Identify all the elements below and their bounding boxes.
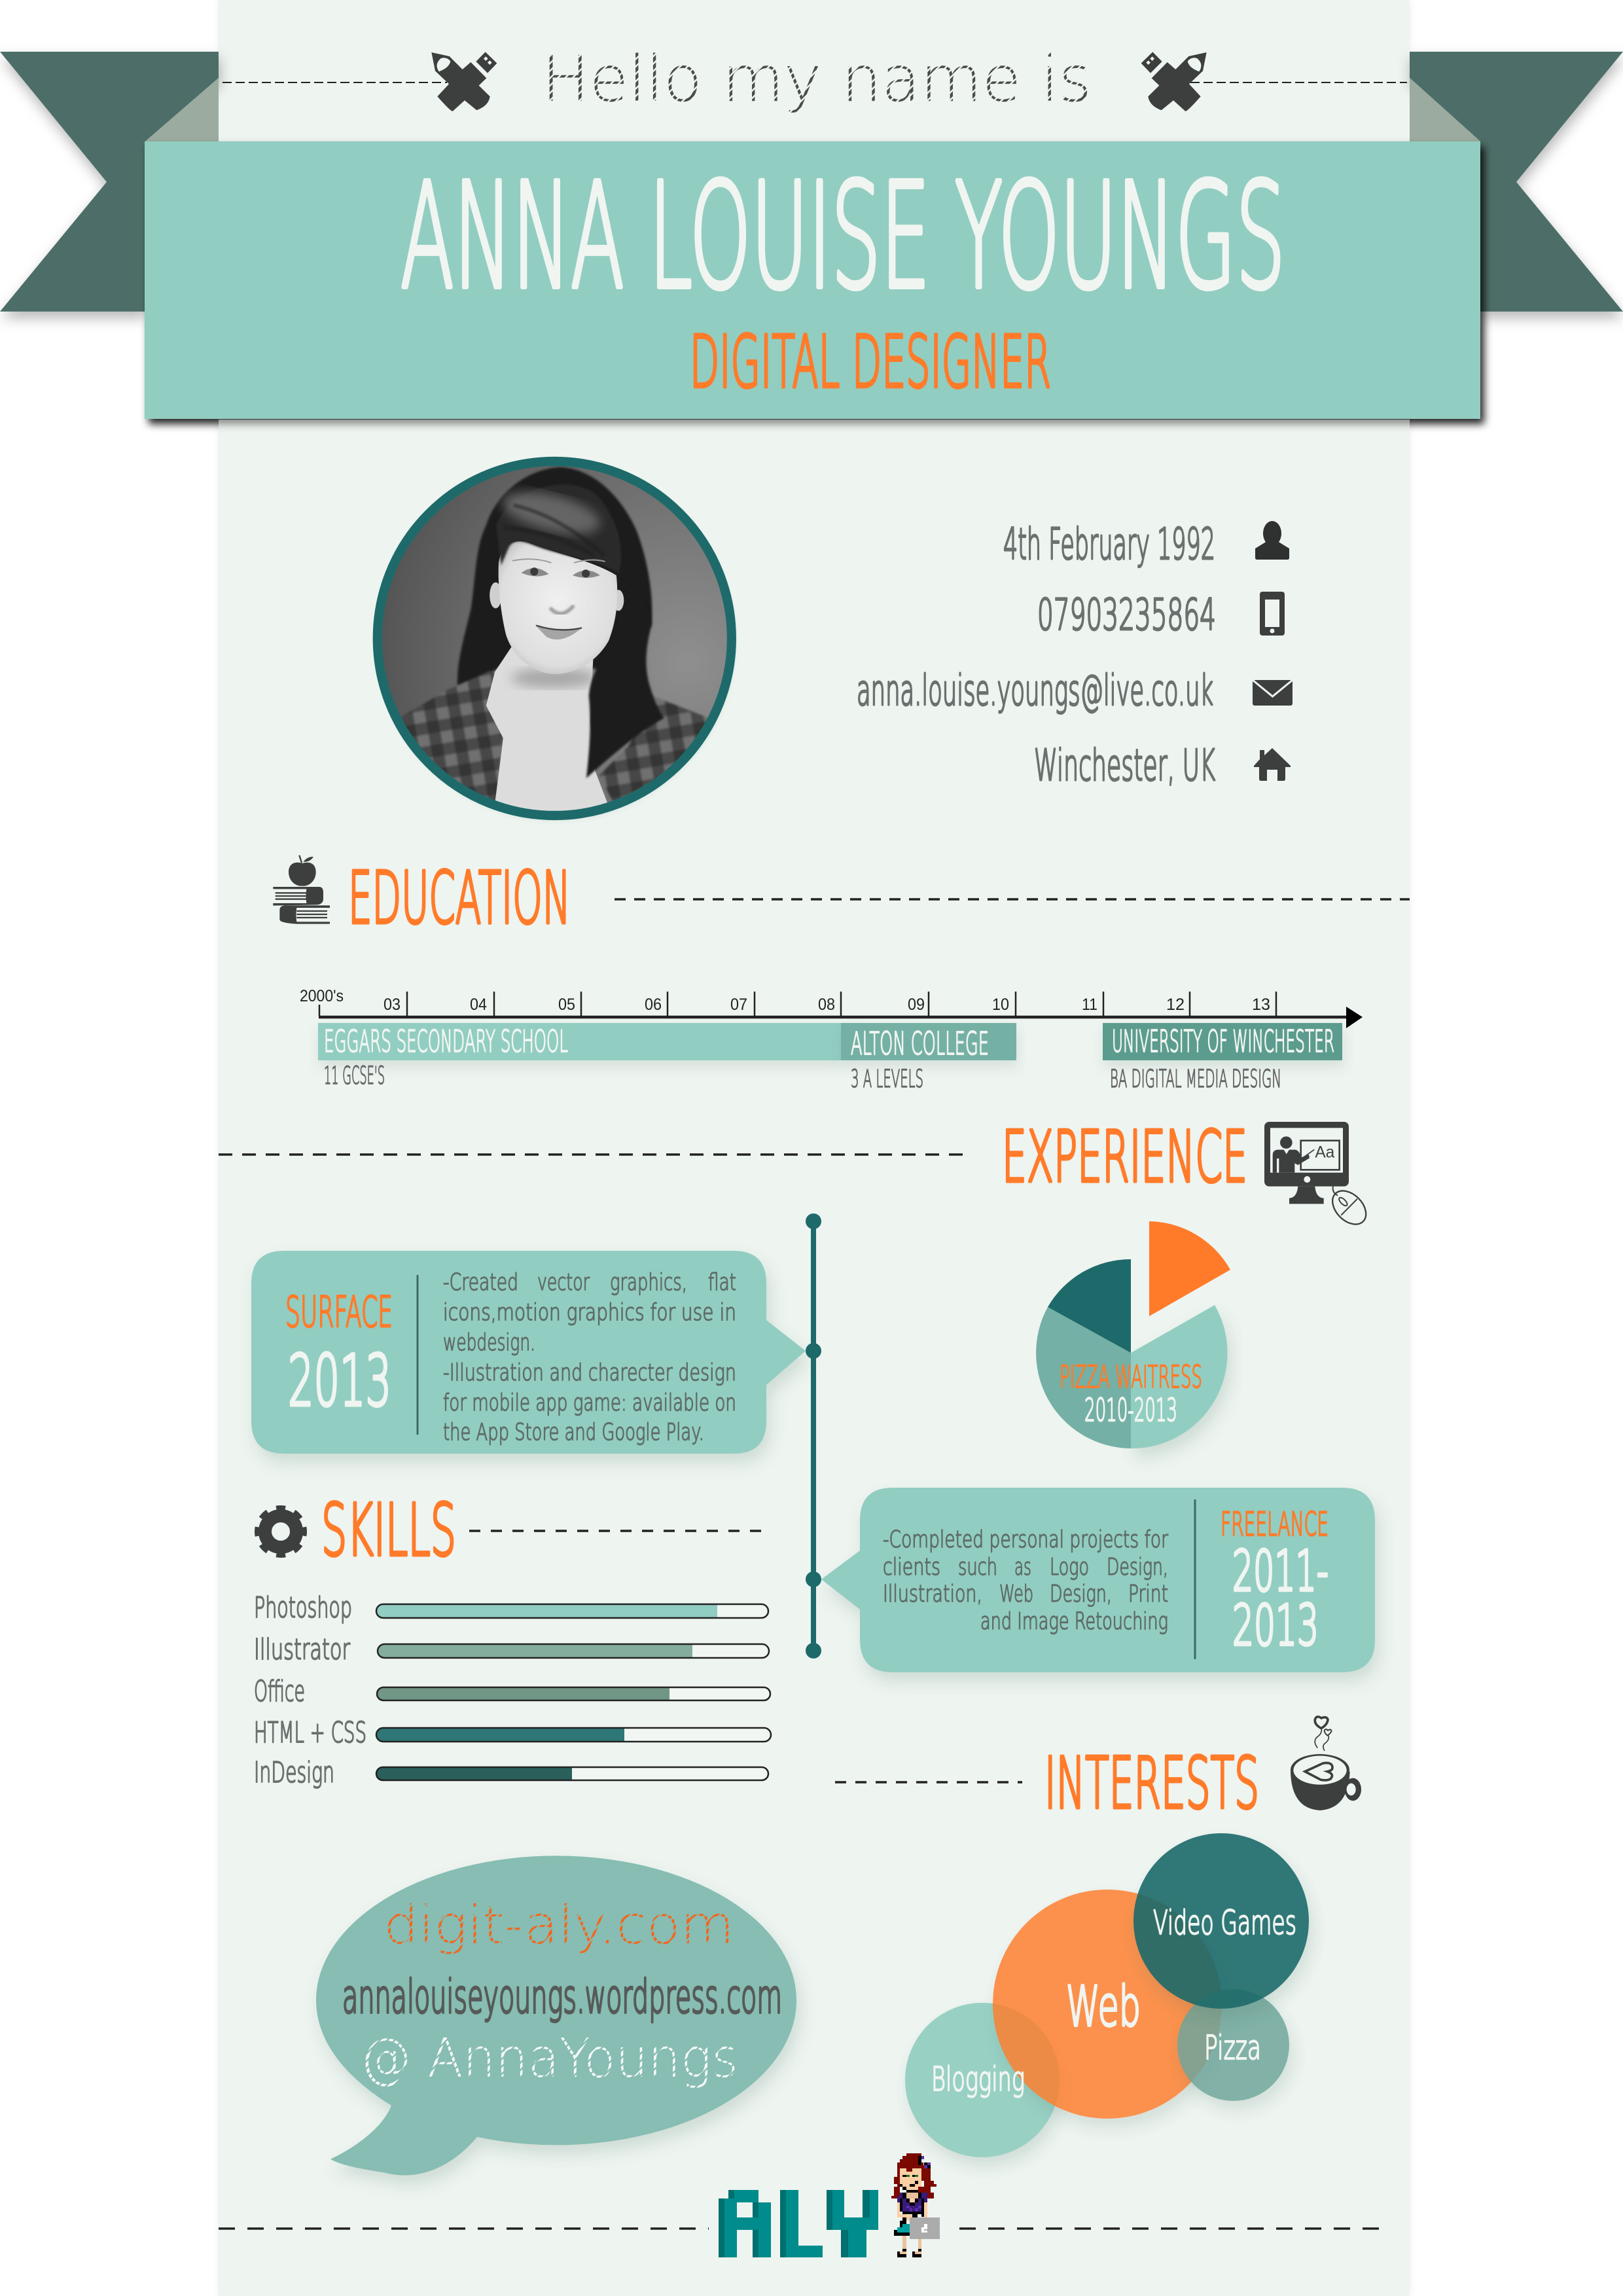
timeline year labels: 2000's — [300, 987, 344, 1005]
skill: photoshop — [254, 1591, 768, 1624]
timeline year labels: 03 — [383, 996, 401, 1014]
labels — [931, 1904, 1296, 2099]
label: pizza waitress: PIZZA WAITRESS — [1060, 1359, 1202, 1395]
hello line with icons — [223, 43, 1407, 116]
skill: office: Office — [254, 1675, 305, 1708]
job description: for mobile app game: available on — [443, 1390, 736, 1416]
icon: pencil and usb right — [1141, 52, 1207, 111]
card shape with pointer — [251, 1251, 806, 1454]
speech bubble shape — [316, 1856, 796, 2176]
text: location: Winchester, UK — [1034, 740, 1215, 791]
icon: coffee cup — [1291, 1717, 1361, 1810]
qualification labels: BA DIGITAL MEDIA DESIGN — [1110, 1065, 1281, 1093]
labels: Web — [1066, 1975, 1141, 2039]
heading: experience: EXPERIENCE — [1002, 1117, 1247, 1198]
skills bars — [254, 1591, 771, 1789]
timeline bar: university — [1103, 1023, 1342, 1060]
icon: person — [1255, 521, 1289, 560]
job description: such — [958, 1554, 997, 1581]
timeline year labels: 08 — [818, 996, 835, 1014]
label: freelance years — [1232, 1539, 1329, 1659]
pixel character — [891, 2153, 940, 2257]
icon: phone — [1260, 592, 1285, 636]
job description: clients — [883, 1554, 940, 1581]
school labels: UNIVERSITY OF WINCHESTER — [1112, 1024, 1334, 1059]
heading: education: EDUCATION — [348, 856, 571, 940]
bubble: video games — [1133, 1833, 1309, 2009]
timeline year labels: 07 — [730, 996, 747, 1014]
icon: pencil and usb left — [431, 52, 497, 111]
bubble: blogging — [905, 2003, 1060, 2157]
pixel letters — [719, 2190, 878, 2257]
pie: orange slice — [1149, 1221, 1230, 1316]
ribbon: main band — [145, 141, 1480, 419]
link: digit-aly.com: digit-aly.com — [383, 1895, 734, 1956]
timeline year labels — [300, 987, 1270, 1014]
page background panel — [219, 0, 1410, 2296]
heading: hello my name is: Hello my name is — [542, 43, 1092, 116]
interest bubbles — [905, 1833, 1309, 2157]
ribbon: left fold — [145, 78, 219, 141]
labels: Pizza — [1204, 2029, 1261, 2068]
timeline year labels: 04 — [470, 996, 487, 1014]
timeline year labels: 05 — [558, 996, 575, 1014]
skill: html and css — [254, 1716, 771, 1749]
timeline year labels: 11 — [1082, 996, 1097, 1014]
job description: -Illustration and charecter design — [443, 1359, 736, 1386]
icon: house — [1254, 748, 1291, 781]
heading: skills: SKILLS — [321, 1488, 456, 1572]
card shape with pointer — [821, 1488, 1375, 1672]
job description: Illustration, — [883, 1581, 982, 1607]
link: wordpress blog: annalouiseyoungs.wordpress.com — [342, 1970, 782, 2024]
ribbon: right tail — [1410, 52, 1623, 312]
labels: Blogging — [931, 2060, 1025, 2099]
timeline year labels: 13 — [1252, 996, 1270, 1014]
text: birth date: 4th February 1992 — [1003, 519, 1215, 569]
portrait photo illustration — [368, 455, 744, 831]
text: phone: 07903235864 — [1037, 590, 1216, 640]
bubble: web — [993, 1890, 1222, 2119]
pie: mid slice — [1036, 1307, 1131, 1448]
skill: photoshop: Photoshop — [254, 1591, 352, 1624]
icon: envelope — [1253, 680, 1293, 706]
job description: graphics, — [610, 1269, 687, 1296]
skill: html and css: HTML + CSS — [254, 1716, 366, 1749]
job description: as — [1014, 1554, 1031, 1581]
job description: flat — [708, 1269, 736, 1296]
icon: monitor and mouse — [1264, 1122, 1372, 1230]
label: year: 2013 — [288, 1340, 391, 1422]
label: pizza years: 2010-2013 — [1084, 1392, 1177, 1429]
job description: Print — [1128, 1581, 1168, 1607]
qualification labels: 11 GCSE'S — [324, 1062, 385, 1090]
panel: freelance job card — [821, 1488, 1375, 1672]
section: experience heading — [219, 1117, 1372, 1230]
ribbon: right fold — [1410, 78, 1480, 141]
label: freelance years: 2013 — [1232, 1593, 1319, 1659]
job description: Design, — [1050, 1581, 1112, 1607]
timeline arrow — [1346, 1007, 1363, 1028]
icon: monitor and mouse: Aa — [1315, 1143, 1335, 1161]
timeline axis — [319, 992, 1349, 1017]
job description — [443, 1269, 736, 1446]
skill: illustrator — [254, 1633, 769, 1666]
panel: speech bubble with links — [316, 1856, 796, 2176]
job description: webdesign. — [443, 1329, 535, 1356]
job description — [883, 1526, 1168, 1635]
timeline year labels: 06 — [645, 996, 662, 1014]
icon: gear — [258, 1509, 304, 1554]
job description: -Created — [443, 1269, 518, 1296]
job description: -Completed personal projects for — [883, 1526, 1168, 1553]
timeline bar: eggars — [318, 1023, 841, 1060]
icon: apple and books — [273, 855, 330, 924]
section: skills heading — [258, 1488, 764, 1572]
link: twitter handle: @ AnnaYoungs — [360, 2028, 738, 2090]
qualification labels: 3 A LEVELS — [851, 1065, 923, 1093]
job description: vector — [537, 1269, 590, 1296]
subtitle: digital designer: DIGITAL DESIGNER — [690, 320, 1051, 404]
education timeline — [300, 987, 1363, 1093]
school labels: ALTON COLLEGE — [851, 1026, 989, 1062]
text: email: anna.louise.youngs@live.co.uk — [857, 667, 1213, 715]
school labels — [324, 1024, 1334, 1062]
section: interests heading — [835, 1717, 1361, 1825]
label: freelance years: 2011- — [1232, 1539, 1329, 1604]
labels: Video Games — [1153, 1904, 1296, 1943]
footer dashes — [219, 2227, 1391, 2230]
panel: pizza waitress pie chart — [1036, 1221, 1230, 1448]
job description: Web — [999, 1581, 1033, 1607]
heading: interests: INTERESTS — [1044, 1743, 1259, 1825]
label: freelance: FREELANCE — [1221, 1505, 1329, 1543]
skill: illustrator: Illustrator — [254, 1633, 351, 1666]
section: education heading — [273, 855, 1410, 940]
contact details — [857, 519, 1293, 791]
pie: dark slice — [1048, 1259, 1131, 1353]
pie: light slice — [1131, 1305, 1228, 1448]
job description: Design, — [1107, 1554, 1168, 1581]
timeline year labels: 10 — [992, 996, 1009, 1014]
bubble: pizza — [1177, 1989, 1289, 2101]
timeline year labels: 09 — [908, 996, 925, 1014]
job description: and Image Retouching — [980, 1608, 1168, 1635]
job description: icons,motion graphics for use in — [443, 1299, 736, 1326]
skill: indesign: InDesign — [254, 1756, 334, 1789]
ribbon: left tail — [0, 52, 219, 312]
timeline year labels: 12 — [1166, 996, 1185, 1014]
logo: ALY pixel letters and character — [719, 2153, 940, 2257]
qualification labels — [324, 1062, 1281, 1093]
skill: indesign — [254, 1756, 768, 1789]
experience vertical timeline — [806, 1213, 821, 1659]
job description: the App Store and Google Play. — [443, 1419, 704, 1446]
label: surface: SURFACE — [285, 1288, 393, 1337]
school labels: EGGARS SECONDARY SCHOOL — [324, 1024, 568, 1059]
skill: office — [254, 1675, 770, 1708]
panel: surface job card — [251, 1251, 806, 1454]
timeline bar: alton — [841, 1023, 1016, 1060]
job description: Logo — [1050, 1554, 1089, 1581]
